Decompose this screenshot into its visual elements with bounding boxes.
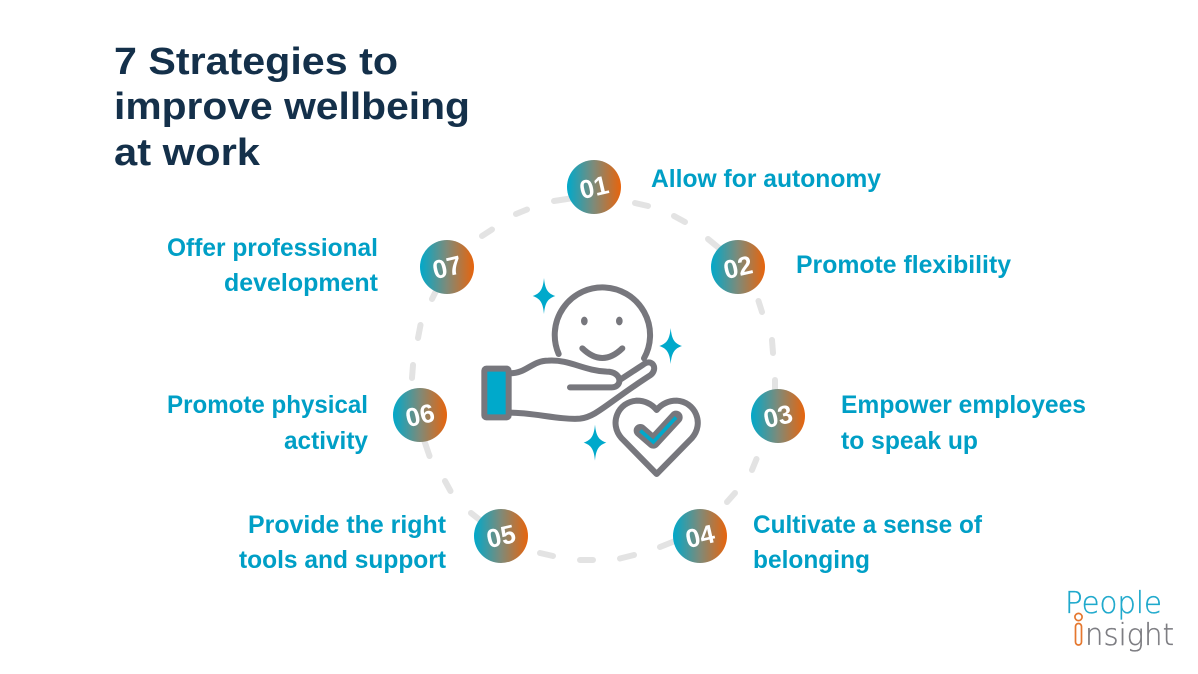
label: cultivate belonging: belonging bbox=[753, 546, 870, 574]
label: tools and support: Provide the right bbox=[248, 511, 447, 539]
label: allow for autonomy: Allow for autonomy bbox=[651, 165, 881, 193]
badge 04 bbox=[673, 509, 727, 563]
icon: sparkles bbox=[533, 278, 682, 461]
label: empower employees: to speak up bbox=[841, 427, 978, 455]
badge 01: 01 bbox=[577, 169, 611, 205]
title bbox=[114, 41, 470, 174]
label: physical activity: Promote physical bbox=[167, 391, 368, 419]
dashed ring bbox=[412, 197, 775, 560]
badge 06 bbox=[393, 388, 447, 442]
title: 7 Strategies to bbox=[114, 41, 398, 83]
badge 05: 05 bbox=[484, 518, 518, 554]
badge 03: 03 bbox=[761, 398, 795, 434]
label: empower employees: Empower employees bbox=[841, 391, 1086, 419]
logo: people insight: nsight bbox=[1085, 618, 1174, 653]
badge 07: 07 bbox=[430, 249, 464, 285]
label: empower employees bbox=[841, 391, 1086, 455]
logo: people insight: People bbox=[1065, 586, 1162, 621]
badge 04: 04 bbox=[683, 518, 718, 554]
badge 02 bbox=[711, 240, 765, 294]
badge 05 bbox=[474, 509, 528, 563]
central icon: hand holding smiley with heart bbox=[484, 278, 698, 474]
badge 02: 02 bbox=[721, 249, 755, 285]
title: improve wellbeing bbox=[114, 86, 470, 128]
badge 07 bbox=[420, 240, 474, 294]
label: physical activity bbox=[167, 391, 368, 455]
label: tools and support: tools and support bbox=[239, 546, 447, 574]
badge 01 bbox=[567, 160, 621, 214]
label: tools and support bbox=[239, 511, 447, 574]
label: professional development: Offer professional bbox=[167, 234, 378, 262]
label: physical activity: activity bbox=[284, 427, 368, 455]
badge 06: 06 bbox=[403, 397, 437, 433]
icon: heart with check bbox=[616, 401, 698, 474]
icon: open hand bbox=[484, 361, 654, 419]
label: professional development: development bbox=[224, 269, 379, 297]
label: cultivate belonging: Cultivate a sense of bbox=[753, 511, 983, 539]
label: cultivate belonging bbox=[753, 511, 983, 574]
logo: people insight bbox=[1065, 586, 1174, 653]
title: at work bbox=[114, 132, 261, 174]
badge 03 bbox=[751, 389, 805, 443]
icon: smiley face bbox=[555, 287, 650, 358]
label: promote flexibility: Promote flexibility bbox=[796, 251, 1011, 279]
label: professional development bbox=[167, 234, 379, 297]
